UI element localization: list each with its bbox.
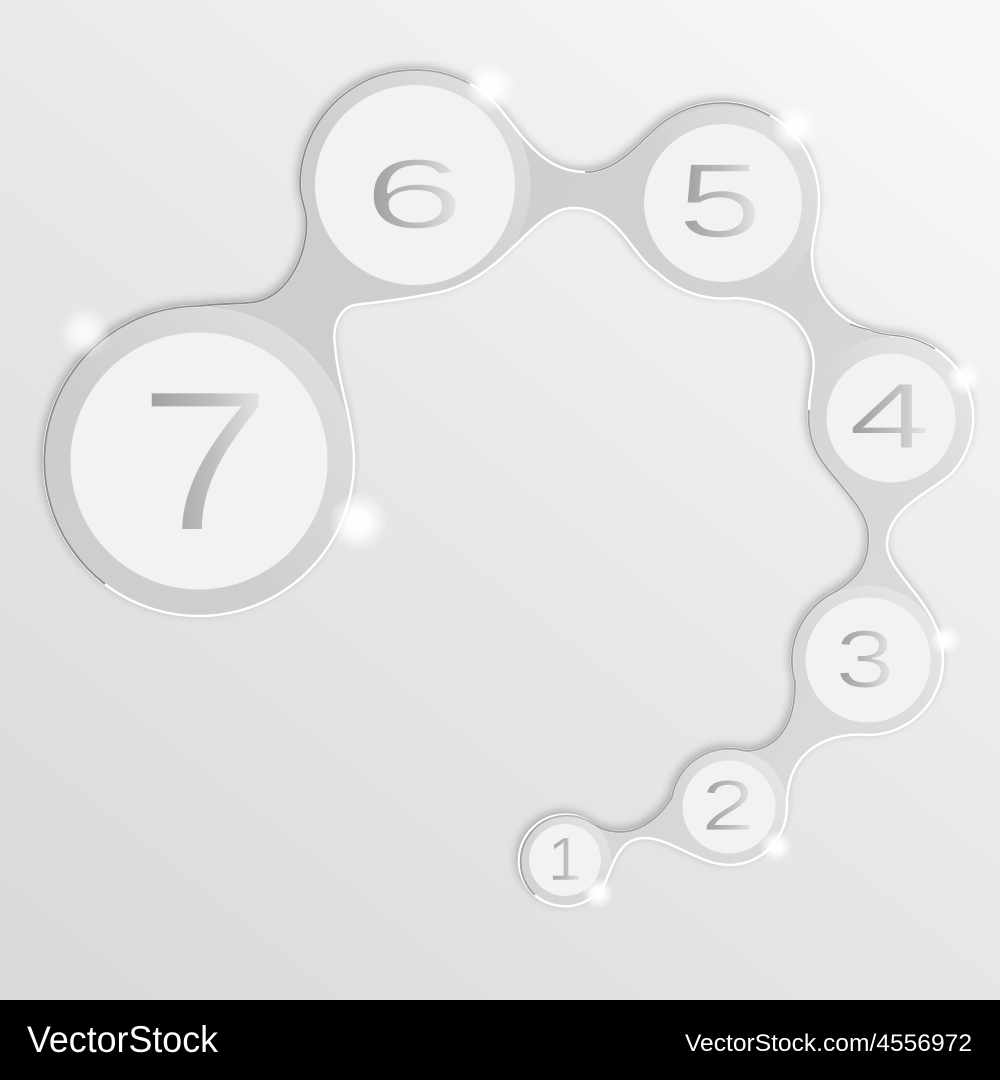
watermark url: VectorStock.com/4556972 bbox=[685, 1030, 972, 1057]
dark edge: circle 4 bbox=[850, 324, 935, 349]
step 5: 5 bbox=[677, 141, 763, 259]
step 7 bbox=[58, 320, 340, 602]
step 2 bbox=[677, 755, 781, 859]
step 3: 3 bbox=[835, 614, 895, 705]
dark edge: circles 7 and 6 bbox=[44, 70, 470, 584]
step 2: 2 bbox=[701, 766, 755, 845]
step 3 bbox=[800, 592, 936, 728]
step 4: 4 bbox=[849, 365, 931, 468]
step 6: 6 bbox=[363, 139, 465, 250]
step 1: 1 bbox=[548, 825, 582, 893]
watermark bar bbox=[0, 1000, 1000, 1080]
step 5 bbox=[635, 115, 811, 291]
step 1 bbox=[524, 819, 606, 901]
watermark logo: VectorStock bbox=[27, 1019, 218, 1060]
dark edge: circle 5 bbox=[585, 103, 770, 172]
light sparkles bbox=[59, 61, 982, 909]
step 6 bbox=[308, 78, 522, 292]
connected glass chain bbox=[42, 67, 973, 906]
dark edge: inner chain from 1 to 4 bbox=[521, 410, 868, 895]
step 4 bbox=[818, 345, 964, 491]
chain body bbox=[44, 70, 973, 906]
chain shadow bbox=[42, 67, 971, 903]
step 7: 7 bbox=[138, 349, 272, 573]
